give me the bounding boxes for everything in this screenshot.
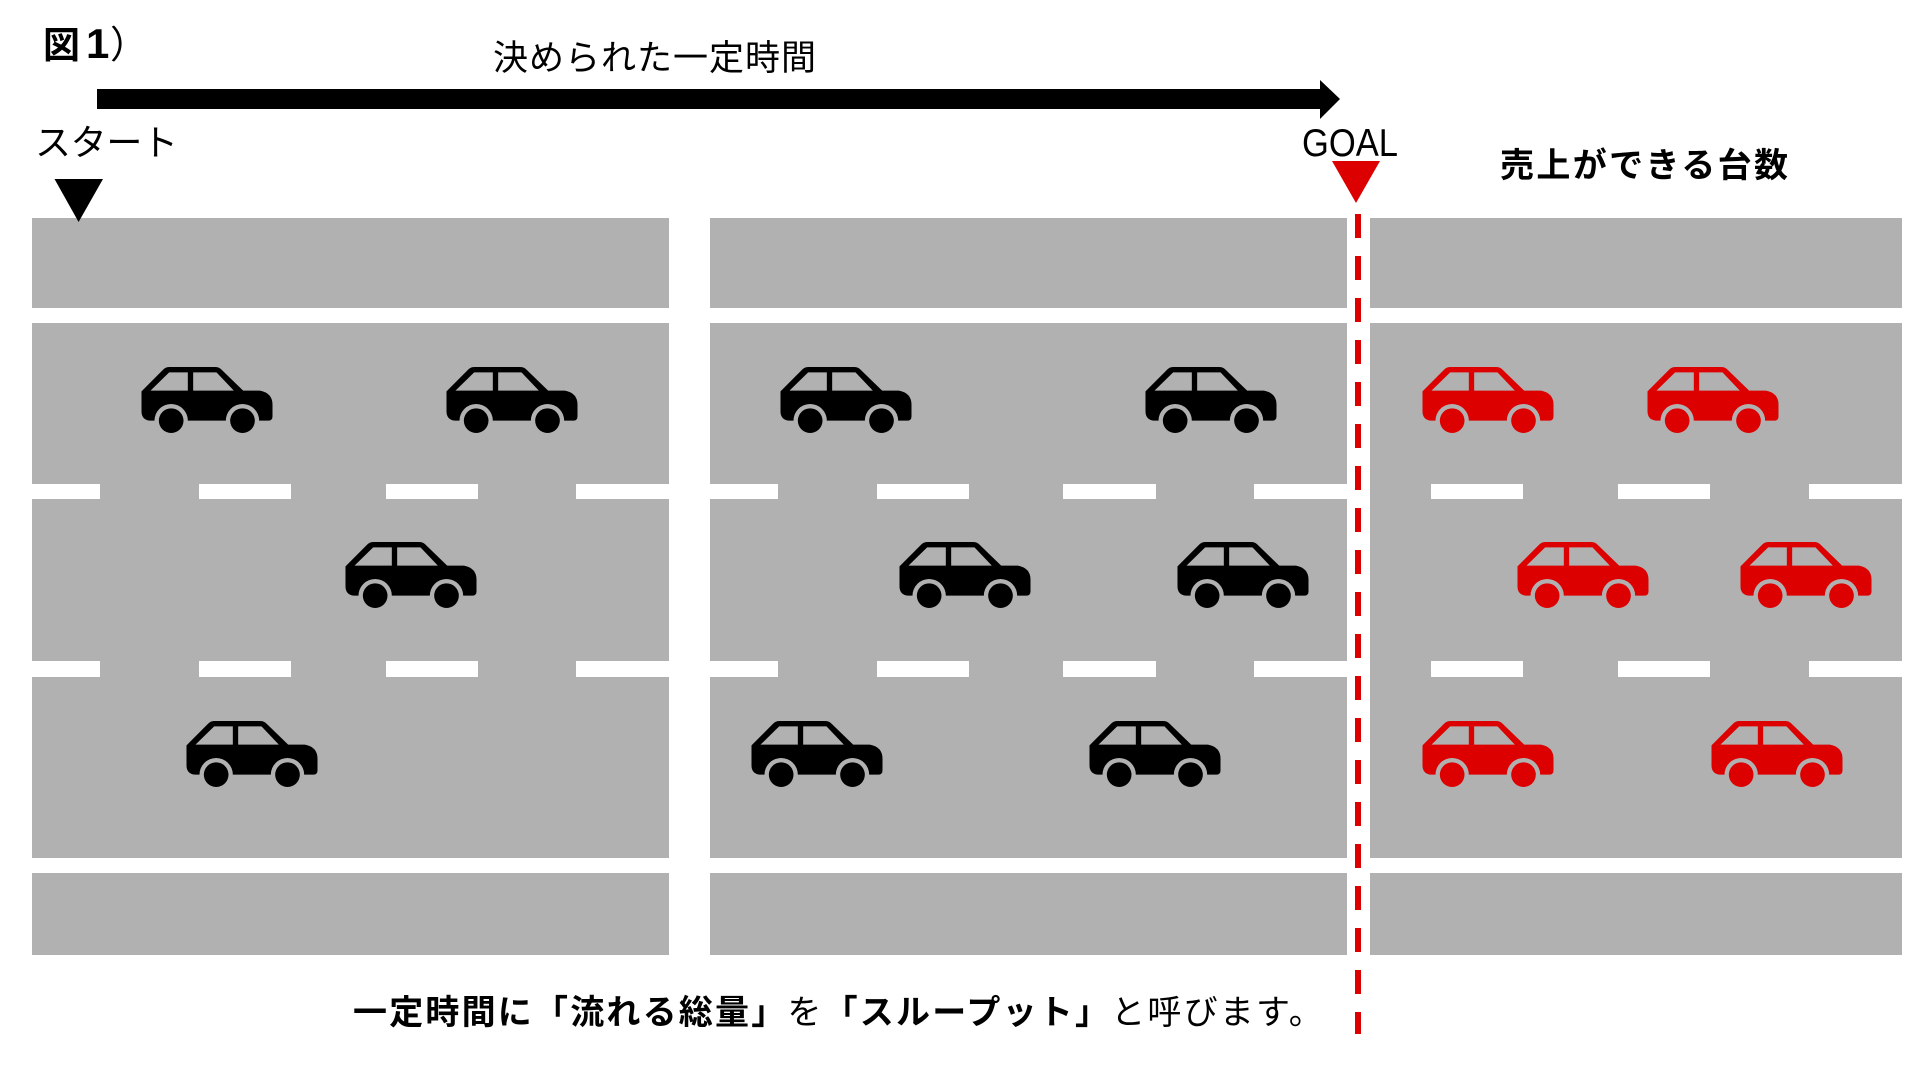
icon: goal marker: [1332, 161, 1380, 203]
car: [186, 721, 318, 787]
start label: スタート: [35, 122, 178, 163]
lane dashes: [1431, 484, 1902, 677]
figure label: 図: [43, 25, 80, 66]
lane dashes: [710, 484, 1347, 677]
figure label: ）: [110, 25, 148, 67]
car: [900, 542, 1030, 608]
car: [752, 721, 882, 787]
sales heading: 売上ができる台数: [1500, 146, 1788, 185]
panel: road section 3 after goal: [1370, 218, 1902, 955]
road lanes: [710, 218, 1347, 955]
goal label: GOAL: [1302, 122, 1398, 165]
car: [780, 367, 912, 433]
figure label: 1: [86, 20, 109, 67]
red car: [1518, 542, 1648, 608]
red car: [1648, 367, 1778, 433]
car: [142, 367, 272, 433]
caption: fixed time period: 決められた一定時間: [493, 39, 816, 78]
car: [1146, 367, 1276, 433]
road lanes: [1370, 218, 1902, 955]
goal dashed line: [1355, 214, 1361, 1034]
red car: [1422, 721, 1554, 787]
car: [346, 542, 476, 608]
red car: [1712, 721, 1842, 787]
panel: road section 2: [710, 218, 1347, 955]
car: [1090, 721, 1220, 787]
car: [1178, 542, 1308, 608]
lane dashes: [32, 484, 669, 677]
icon: start marker: [54, 179, 103, 222]
panel: road section 1: [32, 218, 669, 955]
red car: [1422, 367, 1554, 433]
arrow: time flow: [97, 80, 1340, 119]
car: [446, 367, 578, 433]
bottom explanation: 一定時間に「流れる総量」を「スループット」と呼びます。: [353, 994, 1325, 1032]
red car: [1740, 542, 1872, 608]
road lanes: [32, 218, 669, 955]
